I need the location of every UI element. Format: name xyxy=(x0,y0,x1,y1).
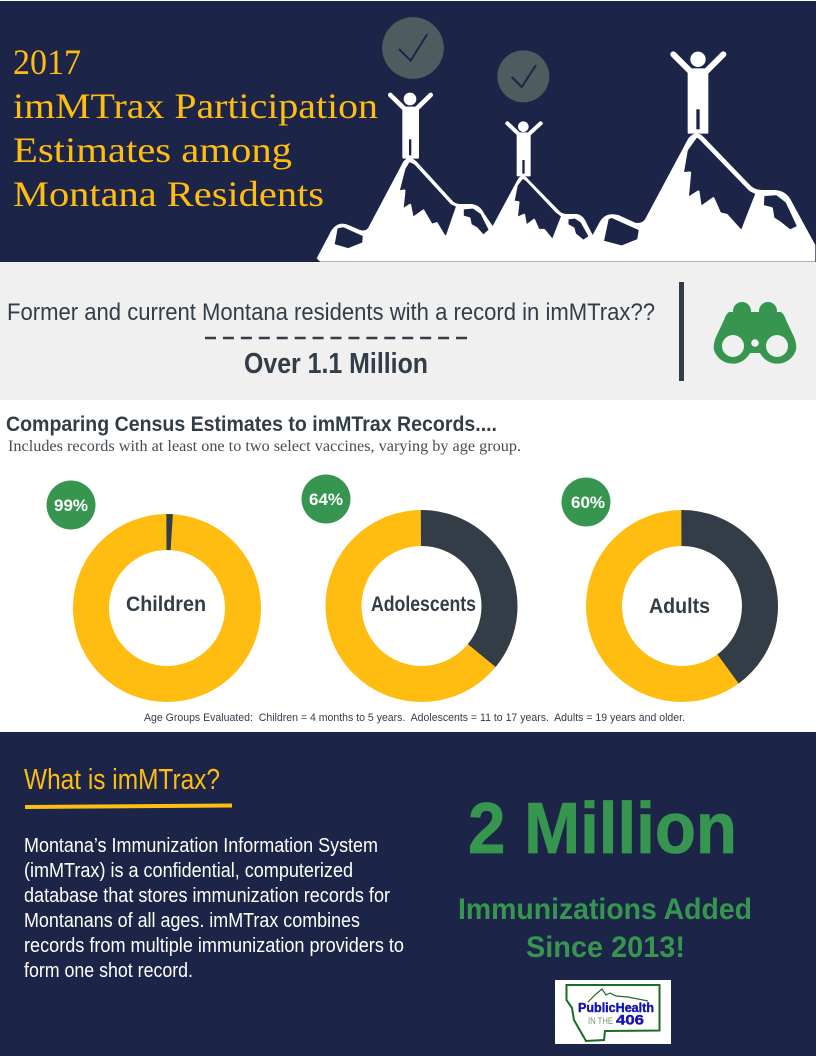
badge: 99%: 99% xyxy=(54,496,88,515)
description text: Montanans of all ages. imMTrax combines xyxy=(24,910,360,932)
statistic: 2 Million: 2 Million xyxy=(468,789,737,869)
panel: header xyxy=(0,1,816,262)
icon: right person xyxy=(673,52,723,134)
illustration: people on mountain peaks xyxy=(317,17,815,262)
icon: binoculars xyxy=(714,302,796,364)
statistic caption: Since 2013! xyxy=(526,931,685,964)
description text: records from multiple immunization providers to xyxy=(24,935,404,957)
title: Estimates among xyxy=(13,130,292,170)
badge: 60%: 60% xyxy=(571,493,605,512)
description text: (imMTrax) is a confidential, computerized xyxy=(24,860,353,882)
panel: record count band xyxy=(0,262,816,400)
icon: left person xyxy=(390,93,431,159)
icon: large check circle xyxy=(382,17,444,79)
donut chart: children: Children xyxy=(126,593,206,616)
icon: middle person xyxy=(507,121,541,176)
section heading: What is imMTrax? xyxy=(24,764,220,796)
logo: Public Health in the 406: PublicHealth xyxy=(578,1001,654,1015)
description text: form one shot record. xyxy=(24,960,193,982)
donut chart: adults: Adults xyxy=(649,595,710,618)
donut chart: adolescents: Adolescents xyxy=(371,593,476,616)
panel: about imMTrax xyxy=(0,732,816,1056)
badge: 99% xyxy=(46,480,96,530)
description text: Montana’s Immunization Information System xyxy=(24,835,378,857)
icon: mountains xyxy=(317,133,815,262)
icon: small check circle xyxy=(497,50,549,102)
panel: census comparison xyxy=(6,413,760,724)
badge: 60% xyxy=(562,478,610,526)
logo: Public Health in the 406 xyxy=(555,980,671,1044)
badge: 64%: 64% xyxy=(309,490,343,509)
title: imMTrax Participation xyxy=(13,86,378,126)
title xyxy=(13,42,378,214)
donut chart: children xyxy=(91,532,243,684)
logo: Public Health in the 406: 406 xyxy=(616,1012,645,1028)
footnote: age groups: Age Groups Evaluated: Children = 4 months to 5 years. Adolescents = 11 to 17 years. Adults = 19 years and older. xyxy=(144,712,685,724)
section subheading: Includes records with at least one to two select vaccines, varying by age group. xyxy=(8,438,521,455)
statistic caption xyxy=(458,893,752,964)
logo: Public Health in the 406: IN THE xyxy=(588,1016,613,1027)
title: Montana Residents xyxy=(13,174,324,214)
description text xyxy=(24,835,404,982)
statistic caption: Immunizations Added xyxy=(458,893,752,926)
big number: Over 1.1 Million xyxy=(244,348,428,380)
badge: 64% xyxy=(302,474,350,524)
donut chart: adults xyxy=(604,528,760,684)
description text: database that stores immunization records for xyxy=(24,885,390,907)
donut chart: adolescents xyxy=(344,528,500,684)
title: 2017 xyxy=(13,42,81,82)
question text: Former and current Montana residents with a record in imMTrax?? xyxy=(7,299,655,326)
section heading: Comparing Census Estimates to imMTrax Records.... xyxy=(6,413,497,436)
